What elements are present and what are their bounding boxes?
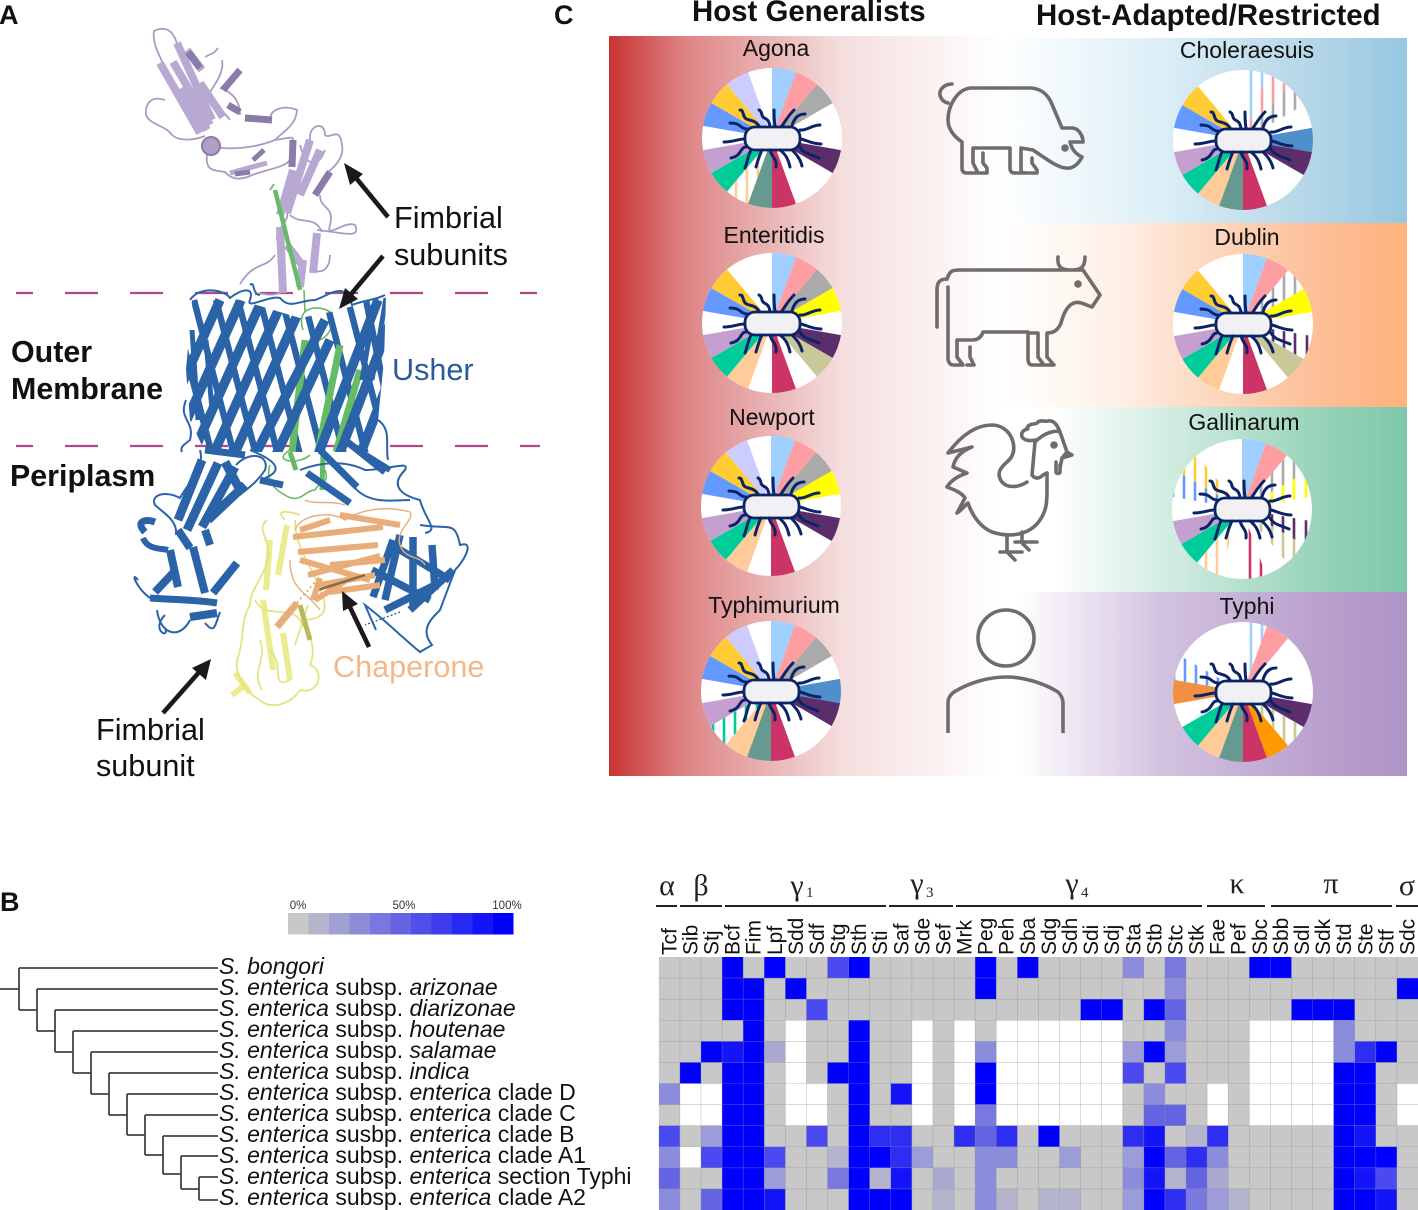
fimbrial operon column labels: Stb — [1143, 923, 1166, 955]
greek fimbrial clade headers — [656, 867, 1418, 906]
fimbrial operon column labels: Stf — [1375, 929, 1398, 955]
fimbrial operon column labels: Mrk — [954, 920, 977, 955]
pie: Typhimurium fimbrial repertoire — [698, 621, 844, 765]
fimbrial operon column labels: Sdf — [806, 923, 829, 955]
fimbrial operon column labels: Tcf — [658, 928, 681, 955]
greek fimbrial clade headers: β — [693, 869, 709, 902]
label: outer membrane: Outer — [11, 335, 92, 369]
fimbrial operon column labels: Stc — [1164, 925, 1188, 955]
tree labels: S. enterica subsp. enterica clade C — [219, 1100, 576, 1126]
pie: Enteritidis fimbrial repertoire — [699, 253, 845, 397]
fimbrial operon column labels: Sdh — [1059, 918, 1082, 955]
panel letter C: C — [554, 0, 574, 30]
greek fimbrial clade headers: 3 — [926, 885, 934, 901]
serovar name: Agona: Agona — [743, 35, 809, 61]
tree labels: S. enterica subsp. enterica clade A2 — [219, 1184, 586, 1210]
fimbrial operon column labels: Sta — [1122, 923, 1145, 955]
structure: lavender fimbrial subunits — [146, 29, 356, 295]
serovar name: Choleraesuis: Choleraesuis — [1180, 37, 1314, 63]
label: chaperone: Chaperone — [333, 650, 484, 684]
fimbrial operon column labels: Pef — [1228, 923, 1251, 955]
fimbrial operon column labels — [658, 917, 1418, 955]
panel A: usher protein structure — [16, 29, 540, 705]
fimbrial operon column labels: Std — [1333, 923, 1356, 955]
tree labels — [219, 953, 632, 1210]
panel C: background gradients — [609, 36, 1407, 776]
membrane dashed boundaries — [16, 293, 540, 446]
fimbrial operon column labels: Sef — [932, 923, 956, 955]
fimbrial operon column labels: Sbb — [1270, 918, 1293, 955]
tree labels: S. enterica subsp. indica — [219, 1058, 470, 1084]
tree labels: S. enterica subsp. enterica clade A1 — [219, 1142, 586, 1168]
serovar name: Dublin: Dublin — [1214, 224, 1280, 250]
pie: Typhi fimbrial repertoire — [1170, 622, 1313, 766]
pie: Newport fimbrial repertoire — [698, 436, 844, 580]
fimbrial operon column labels: Sba — [1017, 917, 1040, 955]
heatmap of fimbrial operon prevalence — [659, 957, 1418, 1210]
panel B: colour scale legend: 0% — [290, 900, 306, 912]
panel B: colour scale legend: 50% — [392, 900, 416, 912]
fimbrial operon column labels: Sdi — [1080, 925, 1103, 955]
greek fimbrial clade headers: α — [659, 869, 675, 902]
structure: blue usher barrel — [186, 298, 386, 452]
fimbrial operon column labels: Lpf — [764, 926, 787, 955]
fimbrial operon column labels: Stj — [700, 930, 724, 955]
label: usher: Usher — [392, 353, 474, 387]
greek fimbrial clade headers: σ — [1399, 869, 1415, 902]
greek fimbrial clade headers: γ — [789, 869, 804, 902]
icon: rooster — [947, 421, 1072, 560]
arrow: to fimbrial subunit — [163, 659, 211, 713]
tree labels: S. enterica subsp. enterica section Typhi — [219, 1163, 632, 1189]
label: fimbrial subunit: Fimbrial — [96, 713, 205, 747]
tree labels: S. enterica subsp. diarizonae — [219, 995, 516, 1021]
greek fimbrial clade headers: 4 — [1081, 885, 1089, 901]
fimbrial operon column labels: Sdk — [1312, 918, 1335, 955]
fimbrial operon column labels: Saf — [890, 923, 913, 955]
serovar name: Newport: Newport — [729, 404, 815, 430]
fimbrial operon column labels: Sde — [911, 918, 934, 955]
structure: periplasmic domains — [134, 440, 468, 652]
tree labels: S. enterica subsp. arizonae — [219, 974, 498, 1000]
fimbrial operon column labels: Sib — [679, 925, 702, 955]
phylogenetic tree — [0, 968, 218, 1200]
panel letter B: B — [0, 887, 20, 917]
fimbrial operon column labels: Fae — [1207, 919, 1230, 955]
tree labels: S. enterica subsp. houtenae — [219, 1016, 505, 1042]
serovar name: Enteritidis: Enteritidis — [724, 222, 824, 248]
fimbrial operon column labels: Sdg — [1038, 918, 1061, 955]
serovar name: Typhimurium: Typhimurium — [708, 592, 840, 618]
structure: yellow fimbrial subunit — [232, 512, 325, 705]
panel B: colour scale legend — [288, 900, 522, 934]
fimbrial operon column labels: Ste — [1354, 923, 1377, 955]
arrow: to lower fimbrial subunit — [339, 256, 383, 309]
fimbrial operon column labels: Sdd — [785, 918, 808, 955]
greek fimbrial clade headers: γ — [909, 867, 924, 900]
label: periplasm: Periplasm — [10, 459, 155, 493]
fimbrial operon column labels: Sdl — [1291, 925, 1314, 955]
pie: Choleraesuis fimbrial repertoire — [1170, 70, 1316, 214]
arrow: to upper fimbrial subunit — [344, 163, 388, 217]
pie: Gallinarum fimbrial repertoire — [1169, 439, 1312, 579]
fimbrial operon column labels: Sdj — [1101, 925, 1124, 955]
greek fimbrial clade headers: γ — [1064, 867, 1079, 900]
label: outer membrane: Membrane — [11, 372, 163, 406]
fimbrial operon column labels: Bcf — [722, 924, 745, 955]
fimbrial operon column labels: Stg — [827, 923, 850, 955]
greek fimbrial clade headers: π — [1323, 867, 1339, 900]
label: fimbrial subunit: subunit — [96, 749, 195, 783]
label: fimbrial subunits: Fimbrial — [394, 201, 503, 235]
structure: orange chaperone — [277, 500, 425, 627]
fimbrial operon column labels: Sti — [869, 930, 892, 955]
icon: pig — [940, 84, 1083, 173]
panel B: colour scale legend: 100% — [492, 900, 522, 912]
tree labels: S. enterica susbp. enterica clade B — [219, 1121, 574, 1147]
label: fimbrial subunits: subunits — [394, 238, 508, 272]
fimbrial operon column labels: Sth — [848, 923, 871, 955]
icon: human — [948, 610, 1063, 733]
greek fimbrial clade headers: κ — [1229, 867, 1245, 900]
tree labels: S. enterica subsp. enterica clade D — [219, 1079, 576, 1105]
arrow: to chaperone — [342, 591, 369, 647]
tree labels: S. enterica subsp. salamae — [219, 1037, 496, 1063]
serovar name: Typhi: Typhi — [1220, 593, 1274, 619]
structure: green plug strand — [275, 190, 300, 290]
pie: Agona fimbrial repertoire — [699, 68, 842, 212]
fimbrial operon column labels: Sbc — [1249, 919, 1272, 955]
pie: Dublin fimbrial repertoire — [1170, 254, 1316, 398]
fimbrial operon column labels: Peh — [996, 918, 1019, 955]
fimbrial operon column labels: Fim — [743, 920, 766, 955]
tree labels: S. bongori — [219, 953, 325, 979]
icon: cow — [937, 257, 1100, 365]
serovar name: Gallinarum: Gallinarum — [1188, 409, 1300, 435]
fimbrial operon column labels: Stk — [1186, 924, 1209, 955]
fimbrial operon column labels: Peg — [975, 918, 998, 955]
greek fimbrial clade headers: 1 — [806, 885, 814, 901]
